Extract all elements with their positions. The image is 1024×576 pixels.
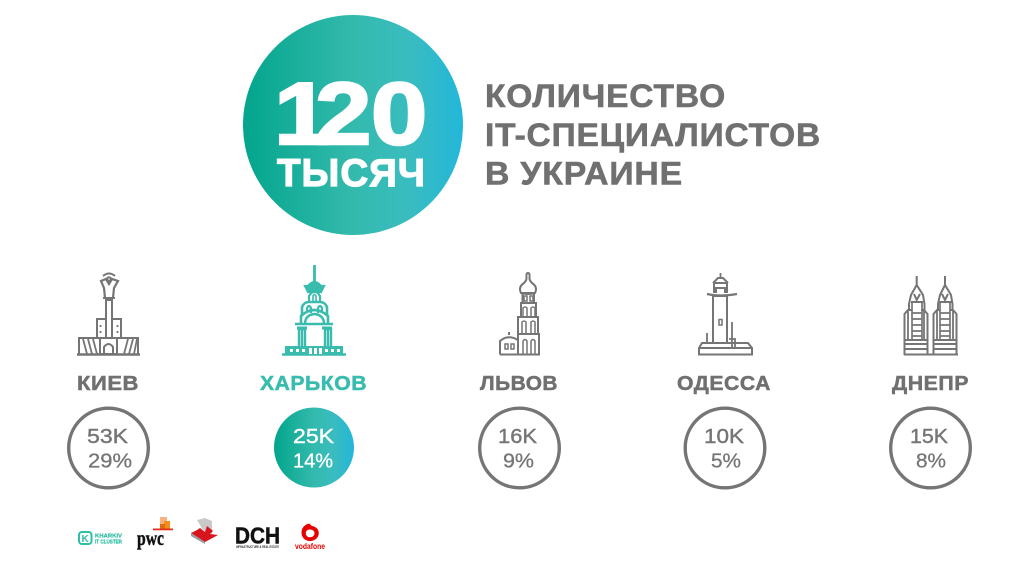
city: Киев: КИЕВ	[77, 373, 139, 395]
city: Днепр	[891, 373, 970, 488]
city: Львов: ЛЬВОВ	[480, 373, 558, 395]
heading: IT-СПЕЦИАЛИСТОВ	[485, 117, 821, 153]
city: Киев: 53K	[87, 426, 129, 448]
city: Харьков: 14%	[293, 450, 333, 472]
city: Харьков	[260, 373, 367, 488]
logo: red block emblem	[191, 518, 218, 544]
hero circle: 120 тысяч: ТЫСЯЧ	[277, 152, 426, 195]
hero circle: 120 тысяч: 120	[274, 65, 427, 163]
logo: Vodafone: vodafone	[295, 541, 325, 551]
heading: В УКРАИНЕ	[485, 156, 683, 192]
city: Киев	[69, 373, 148, 488]
logo: DCH: INFRASTRUCTURE & REAL ESTATE	[236, 545, 279, 549]
city: Одесса: ОДЕССА	[677, 373, 771, 395]
logo: Kharkiv IT Cluster: KHARKIV	[95, 534, 122, 540]
city: Киев: 29%	[88, 450, 132, 472]
logo: DCH: DCH	[235, 522, 280, 548]
city: Одесса: 5%	[711, 450, 741, 472]
city: Харьков: ХАРЬКОВ	[260, 373, 367, 395]
icon: Kharkiv cathedral	[282, 265, 346, 354]
logo: Vodafone	[295, 524, 325, 551]
logo: Kharkiv IT Cluster	[79, 532, 123, 546]
icon: Dnipro twin towers	[904, 276, 958, 355]
icon: Odesa lighthouse	[699, 273, 752, 354]
logo: PwC: pwc	[137, 526, 164, 550]
icon: Lviv bell tower	[500, 273, 539, 354]
city: Львов: 16K	[498, 426, 538, 448]
logo: Kharkiv IT Cluster: K	[82, 534, 90, 545]
logo: Kharkiv IT Cluster: IT CLUSTER	[95, 540, 123, 546]
icon: Kyiv independence monument	[77, 274, 140, 354]
city: Одесса	[677, 373, 771, 488]
city: Днепр: 15K	[910, 426, 949, 448]
city: Львов	[480, 373, 559, 488]
heading: КОЛИЧЕСТВО	[485, 78, 726, 114]
hero circle: 120 тысяч	[243, 15, 463, 235]
heading	[485, 78, 821, 192]
city: Харьков: 25K	[293, 426, 335, 448]
city: Днепр: ДНЕПР	[892, 373, 969, 395]
city: Днепр: 8%	[916, 450, 946, 472]
city: Одесса: 10K	[704, 426, 745, 448]
city: Львов: 9%	[503, 450, 534, 472]
